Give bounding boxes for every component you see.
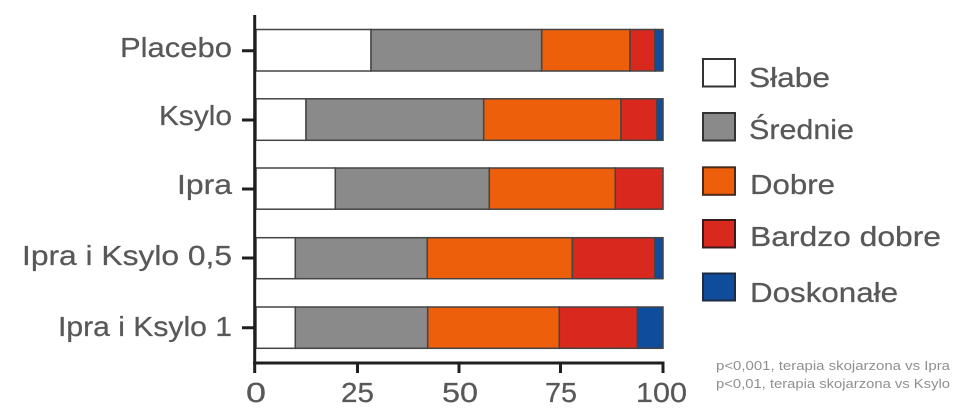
legend item: Bardzo dobre [703,220,941,252]
footnote: p<0,001, terapia skojarzona vs Ipra [716,358,951,373]
category labels [22,32,232,342]
category labels: Ksylo [159,100,232,131]
bar: Ipra i Ksylo 0,5 [256,238,663,279]
footnote [716,358,951,391]
x axis labels: 100 [636,377,687,408]
axes and tick marks [242,15,664,373]
category labels: Ipra [177,169,232,200]
x axis labels: 50 [442,377,478,408]
bar: Ipra i Ksylo 1 [256,307,663,348]
legend item: Bardzo dobre: Bardzo dobre [750,221,941,252]
legend item: Dobre: Dobre [750,169,835,200]
bar: Ksylo [256,99,663,140]
legend item: Słabe [703,59,830,93]
x axis labels: 0 [246,377,266,408]
category labels: Ipra i Ksylo 0,5 [22,240,232,271]
category labels: Placebo [120,32,232,63]
x axis labels: 75 [545,377,577,408]
legend item: Średnie [703,113,854,145]
x axis labels: 25 [341,377,374,408]
legend item: Doskonałe [703,274,898,308]
footnote: p<0,01, terapia skojarzona vs Ksylo [716,376,950,391]
category labels: Ipra i Ksylo 1 [58,311,232,342]
legend item: Średnie: Średnie [749,113,854,145]
legend item: Słabe: Słabe [749,62,830,93]
legend [703,59,941,308]
legend item: Dobre [703,167,835,200]
bar: Ipra [256,168,663,209]
legend item: Doskonałe: Doskonałe [750,277,898,308]
x axis labels [246,377,687,408]
bar: Placebo [256,30,663,71]
